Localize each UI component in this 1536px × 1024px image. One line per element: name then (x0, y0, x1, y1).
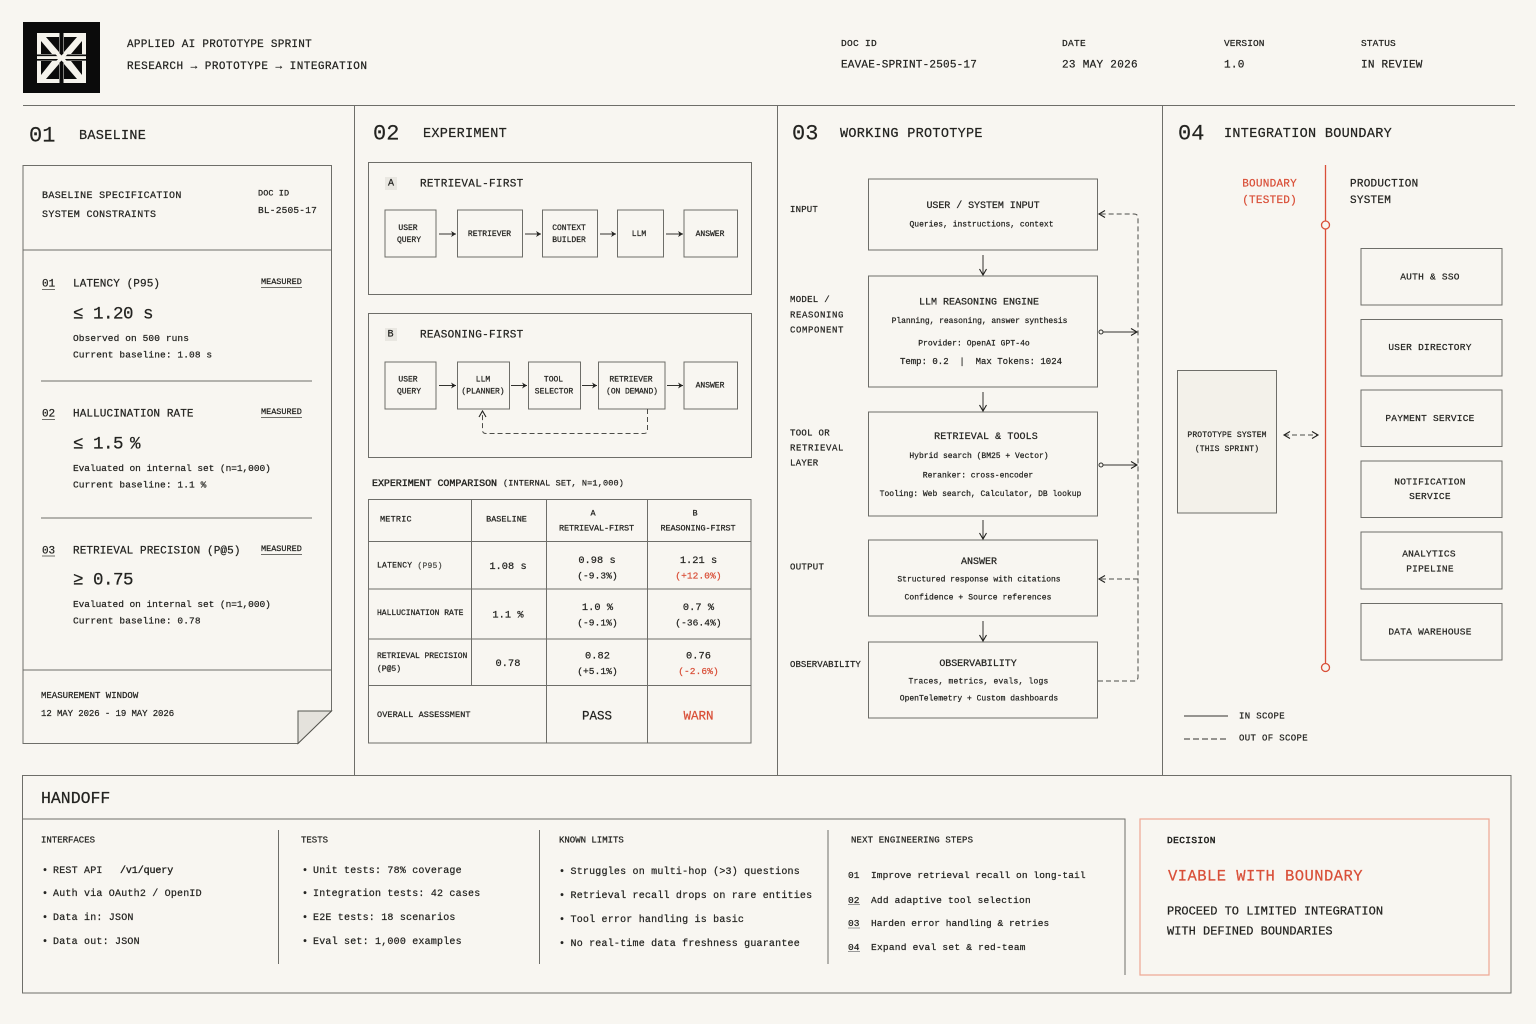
layer labels: MODEL / (790, 295, 830, 305)
measurement window (41, 691, 174, 719)
table header row: A (590, 509, 596, 519)
row latency: 1.08 s (489, 561, 527, 573)
box: user system input (868, 179, 1098, 250)
row latency: LATENCY (P95) (377, 562, 443, 571)
row overall assessment: PASS (582, 710, 612, 724)
decision box: WITH DEFINED BOUNDARIES (1167, 925, 1333, 939)
flow B reasoning-first: RETRIEVER (609, 376, 653, 385)
column: interfaces: • (42, 866, 48, 877)
status: STATUS (1361, 38, 1396, 49)
column: known limits: Tool error handling is basic (570, 914, 744, 926)
flow A retrieval-first: USER (398, 224, 418, 233)
box: llm reasoning engine (868, 276, 1098, 387)
doc id: DOC ID (841, 38, 877, 49)
layer labels: RETRIEVAL (790, 444, 844, 454)
flow A retrieval-first: CONTEXT (552, 224, 586, 233)
production system label: PRODUCTION (1350, 179, 1419, 191)
arrow: retrieval telemetry (1099, 463, 1137, 467)
layer labels: TOOL OR (790, 429, 830, 439)
service: user directory (1361, 320, 1502, 376)
flow B reasoning-first: TOOL (544, 376, 563, 385)
metric 03 precision: ≥ 0.75 (73, 571, 133, 591)
box: retrieval and tools: Tooling: Web search, Calculator, DB lookup (880, 490, 1082, 499)
column: interfaces: Data out: JSON (53, 937, 140, 948)
column: next engineering steps: NEXT ENGINEERING STEPS (851, 836, 973, 846)
status: IN REVIEW (1361, 60, 1423, 72)
column: next engineering steps: 03 (848, 918, 860, 929)
heading: 02 experiment (373, 121, 507, 146)
box: retrieval and tools: RETRIEVAL & TOOLS (934, 432, 1038, 443)
column: next engineering steps: 02 (848, 895, 860, 906)
prototype system box: PROTOTYPE SYSTEM (1187, 431, 1267, 440)
column: interfaces: /v1/query (120, 865, 173, 877)
legend: OUT OF SCOPE (1239, 734, 1308, 744)
arrow: feedback to answer (1099, 578, 1138, 580)
metric 02 hallucination: 02 (42, 409, 55, 421)
metric 03 precision: Current baseline: 0.78 (73, 616, 201, 627)
flow B reasoning-first: SELECTOR (535, 388, 573, 397)
metric 03 precision: 03 (42, 546, 55, 558)
prototype system box (1178, 370, 1276, 513)
flow B reasoning-first: ANSWER (696, 382, 725, 391)
box: answer (868, 540, 1098, 616)
version: VERSION (1224, 38, 1265, 49)
column: interfaces: INTERFACES (41, 836, 95, 846)
row hallucination: 1.0 % (582, 602, 614, 614)
layer labels (790, 205, 861, 670)
row precision: 0.78 (496, 658, 520, 670)
column: interfaces: REST API (53, 866, 103, 877)
arrow: engine telemetry (1099, 330, 1137, 334)
box: answer: Confidence + Source references (904, 594, 1052, 603)
column: known limits: Retrieval recall drops on rare entities (570, 890, 812, 902)
column: tests: • (302, 889, 308, 900)
metric 03 precision: MEASURED (261, 544, 302, 554)
panel: 04 integration boundary (1178, 121, 1502, 744)
row precision: RETRIEVAL PRECISION (377, 652, 468, 661)
metric 01 latency: Current baseline: 1.08 s (73, 350, 212, 361)
box: retrieval and tools: Hybrid search (BM25 + Vector) (909, 452, 1049, 461)
column: interfaces: • (42, 889, 48, 900)
table header row: B (692, 509, 698, 519)
spec title: BASELINE SPECIFICATION (42, 191, 182, 202)
legend: IN SCOPE (1239, 712, 1285, 722)
row precision: 0.82 (585, 650, 610, 662)
row hallucination: HALLUCINATION RATE (377, 609, 464, 618)
row hallucination: 0.7 % (683, 602, 715, 614)
layer labels: INPUT (790, 205, 818, 215)
comparison heading (372, 479, 624, 490)
date (1062, 38, 1138, 72)
flow A retrieval-first: RETRIEVER (468, 230, 511, 239)
comparison heading: (INTERNAL SET, N=1,000) (503, 479, 624, 489)
heading: 02 experiment: EXPERIMENT (423, 127, 507, 142)
column: interfaces: Data in: JSON (53, 912, 134, 924)
spec doc id: BL-2505-17 (258, 205, 317, 216)
box: observability: OBSERVABILITY (939, 659, 1017, 670)
column: tests: • (302, 866, 308, 877)
header (23, 22, 1423, 93)
arrow: prototype to boundary (1284, 434, 1318, 436)
row hallucination: (-36.4%) (675, 618, 722, 629)
metric 03 precision: Evaluated on internal set (n=1,000) (73, 599, 271, 610)
heading: 04 integration boundary (1178, 121, 1392, 146)
panel: 01 baseline (23, 123, 332, 743)
service: data warehouse: DATA WAREHOUSE (1388, 627, 1472, 638)
service: notification (1361, 461, 1502, 518)
arrow: retrieval to answer (982, 520, 984, 539)
row latency: (+12.0%) (675, 571, 722, 582)
flow B reasoning-first: (PLANNER) (461, 388, 505, 397)
row precision: (+5.1%) (577, 666, 618, 677)
box: llm reasoning engine: Provider: OpenAI GPT-4o (918, 340, 1030, 349)
service: data warehouse (1361, 604, 1502, 660)
metric 01 latency: 01 (42, 279, 56, 291)
spec doc id: DOC ID (258, 189, 289, 199)
header subtitle: RESEARCH → PROTOTYPE → INTEGRATION (127, 61, 367, 73)
panel: 03 working prototype (790, 121, 1138, 718)
heading: 01 baseline (29, 123, 146, 148)
table header row: METRIC (380, 515, 412, 525)
flow A retrieval-first (368, 162, 752, 294)
flow A retrieval-first: LLM (632, 230, 646, 239)
panel: handoff (22, 776, 1511, 993)
column: tests: TESTS (301, 836, 328, 846)
column: interfaces: Auth via OAuth2 / OpenID (53, 888, 202, 900)
column: known limits: No real-time data freshness guarantee (570, 938, 800, 950)
metric 02 hallucination: MEASURED (261, 407, 302, 417)
box: answer: Structured response with citations (897, 576, 1061, 585)
layer labels: OUTPUT (790, 563, 825, 573)
column: next engineering steps: Harden error handling & retries (871, 918, 1049, 929)
service: analytics: ANALYTICS (1402, 549, 1456, 560)
date: 23 MAY 2026 (1062, 60, 1138, 72)
column: known limits: • (559, 915, 565, 926)
column: tests: Integration tests: 42 cases (313, 888, 480, 900)
row precision: (-2.6%) (678, 666, 719, 677)
heading: 03 working prototype: WORKING PROTOTYPE (840, 127, 983, 142)
boundary label: (TESTED) (1242, 195, 1297, 207)
box: llm reasoning engine: LLM REASONING ENGINE (919, 298, 1039, 309)
service: payment (1361, 390, 1502, 446)
box: observability (868, 642, 1098, 718)
boundary label (1242, 179, 1297, 207)
service: notification: SERVICE (1409, 491, 1451, 502)
flow A retrieval-first: A (388, 179, 394, 190)
spec title: SYSTEM CONSTRAINTS (42, 210, 156, 221)
flow B reasoning-first: B (387, 330, 394, 341)
column: tests: • (302, 937, 308, 948)
row latency: (-9.3%) (577, 571, 618, 582)
flow A retrieval-first: ANSWER (696, 230, 725, 239)
metric 01 latency: ≤ 1.20 s (73, 305, 153, 325)
comparison heading: EXPERIMENT COMPARISON (372, 479, 497, 490)
column: known limits: • (559, 891, 565, 902)
panel: 02 experiment (368, 121, 752, 743)
doc id (841, 38, 977, 72)
arrow: input to engine (982, 255, 984, 275)
arrow: answer to observability (982, 621, 984, 641)
row overall assessment (377, 710, 714, 724)
handoff title: HANDOFF (41, 789, 110, 808)
service: analytics (1361, 532, 1502, 589)
heading: 03 working prototype: 03 (792, 121, 818, 146)
spec doc id (258, 189, 317, 216)
table header row (380, 509, 736, 534)
boundary line (1322, 165, 1330, 672)
row latency (377, 555, 722, 582)
boundary label: BOUNDARY (1242, 179, 1297, 191)
column: next engineering steps: Improve retrieval recall on long-tail (871, 870, 1086, 881)
table header row: REASONING-FIRST (660, 524, 736, 534)
service: user directory: USER DIRECTORY (1388, 342, 1472, 353)
heading: 02 experiment: 02 (373, 121, 399, 146)
column: tests (301, 836, 480, 948)
flow A retrieval-first: RETRIEVAL-FIRST (420, 179, 524, 191)
decision box: VIABLE WITH BOUNDARY (1168, 868, 1363, 886)
metric 02 hallucination: HALLUCINATION RATE (73, 409, 194, 421)
version (1224, 38, 1265, 72)
column: next engineering steps (848, 836, 1086, 953)
heading: 04 integration boundary: 04 (1178, 121, 1204, 146)
row hallucination: 1.1 % (492, 609, 524, 621)
flow B reasoning-first: LLM (476, 376, 490, 385)
production system label (1350, 179, 1419, 207)
box: retrieval and tools (868, 412, 1098, 516)
metric 01 latency: LATENCY (P95) (73, 279, 160, 291)
box: observability: OpenTelemetry + Custom dashboards (900, 695, 1058, 704)
box: user system input: Queries, instructions, context (909, 221, 1054, 230)
table header row: BASELINE (486, 515, 527, 525)
box: observability: Traces, metrics, evals, logs (908, 678, 1049, 687)
metric 03 precision (42, 544, 302, 627)
heading: 01 baseline: 01 (29, 123, 55, 148)
decision box (1140, 819, 1489, 975)
specification sheet (23, 166, 332, 744)
heading: 04 integration boundary: INTEGRATION BOUNDARY (1224, 127, 1392, 142)
layer labels: LAYER (790, 459, 819, 469)
service: auth (1361, 248, 1502, 305)
column: known limits: • (559, 939, 565, 950)
column: interfaces: • (42, 913, 48, 924)
column: next engineering steps: 04 (848, 942, 860, 953)
legend (1184, 712, 1308, 744)
column: tests: Unit tests: 78% coverage (313, 865, 462, 877)
metric 02 hallucination: Current baseline: 1.1 % (73, 480, 207, 491)
column: interfaces (41, 836, 202, 948)
box: llm reasoning engine: Temp: 0.2 | Max Tokens: 1024 (900, 357, 1062, 367)
service: payment: PAYMENT SERVICE (1385, 413, 1475, 424)
column: next engineering steps: Add adaptive tool selection (871, 895, 1031, 906)
column: known limits: Struggles on multi-hop (>3) questions (570, 866, 800, 878)
metric 01 latency: MEASURED (261, 277, 302, 287)
metric 02 hallucination: Evaluated on internal set (n=1,000) (73, 463, 271, 474)
production system label: SYSTEM (1350, 195, 1391, 207)
header title: APPLIED AI PROTOTYPE SPRINT (127, 39, 312, 51)
doc id: EAVAE-SPRINT-2505-17 (841, 60, 977, 72)
row precision (377, 650, 719, 677)
service: auth: AUTH & SSO (1400, 272, 1460, 283)
arrow: engine to retrieval (982, 392, 984, 411)
decision box: DECISION (1167, 835, 1216, 846)
column: known limits (559, 836, 812, 950)
measurement window: MEASUREMENT WINDOW (41, 691, 139, 701)
arrow: observability feedback loop (1098, 214, 1138, 681)
column: tests: E2E tests: 18 scenarios (313, 912, 456, 924)
flow A retrieval-first: QUERY (397, 236, 421, 245)
flow B reasoning-first: USER (398, 376, 418, 385)
layer labels: REASONING (790, 311, 844, 321)
row hallucination (377, 602, 722, 629)
flow B reasoning-first: QUERY (397, 388, 421, 397)
heading: 01 baseline: BASELINE (79, 129, 146, 144)
service: notification: NOTIFICATION (1394, 477, 1466, 488)
metric 01 latency: Observed on 500 runs (73, 333, 189, 344)
column: known limits: KNOWN LIMITS (559, 836, 624, 846)
version: 1.0 (1224, 60, 1245, 72)
row precision: 0.76 (686, 650, 711, 662)
icon: logo (23, 22, 100, 93)
heading: 03 working prototype (792, 121, 983, 146)
column: known limits: • (559, 867, 565, 878)
row hallucination: (-9.1%) (577, 618, 618, 629)
service: analytics: PIPELINE (1406, 564, 1454, 575)
row latency: 1.21 s (680, 555, 717, 567)
date: DATE (1062, 38, 1086, 49)
flow A retrieval-first: BUILDER (552, 236, 586, 245)
metric 02 hallucination (42, 407, 302, 491)
box: retrieval and tools: Reranker: cross-encoder (923, 472, 1033, 481)
decision box: PROCEED TO LIMITED INTEGRATION (1167, 905, 1383, 919)
column: tests: Eval set: 1,000 examples (313, 936, 462, 948)
row latency: 0.98 s (578, 555, 616, 567)
box: llm reasoning engine: Planning, reasoning, answer synthesis (892, 317, 1068, 326)
metric 02 hallucination: ≤ 1.5 % (73, 435, 141, 455)
prototype system box: (THIS SPRINT) (1195, 445, 1259, 454)
flow B reasoning-first (368, 314, 752, 458)
status (1361, 38, 1423, 72)
row overall assessment: WARN (683, 710, 714, 724)
layer labels: OBSERVABILITY (790, 660, 861, 670)
spec title (42, 191, 182, 221)
metric 01 latency (42, 277, 302, 361)
table header row: RETRIEVAL-FIRST (559, 524, 634, 534)
flow B reasoning-first: REASONING-FIRST (420, 330, 524, 342)
layer labels: COMPONENT (790, 326, 844, 336)
icon: folded corner (298, 711, 332, 744)
box: user system input: USER / SYSTEM INPUT (926, 200, 1040, 212)
flow B reasoning-first: (ON DEMAND) (606, 388, 658, 397)
box: answer: ANSWER (961, 557, 997, 568)
column: next engineering steps: Expand eval set & red-team (871, 942, 1026, 953)
row precision: (P@5) (377, 665, 401, 674)
row overall assessment: OVERALL ASSESSMENT (377, 710, 471, 720)
comparison table (368, 500, 751, 743)
column: tests: • (302, 913, 308, 924)
measurement window: 12 MAY 2026 - 19 MAY 2026 (41, 709, 174, 719)
metric 03 precision: RETRIEVAL PRECISION (P@5) (73, 546, 241, 558)
column: interfaces: • (42, 937, 48, 948)
column: next engineering steps: 01 (848, 870, 860, 881)
